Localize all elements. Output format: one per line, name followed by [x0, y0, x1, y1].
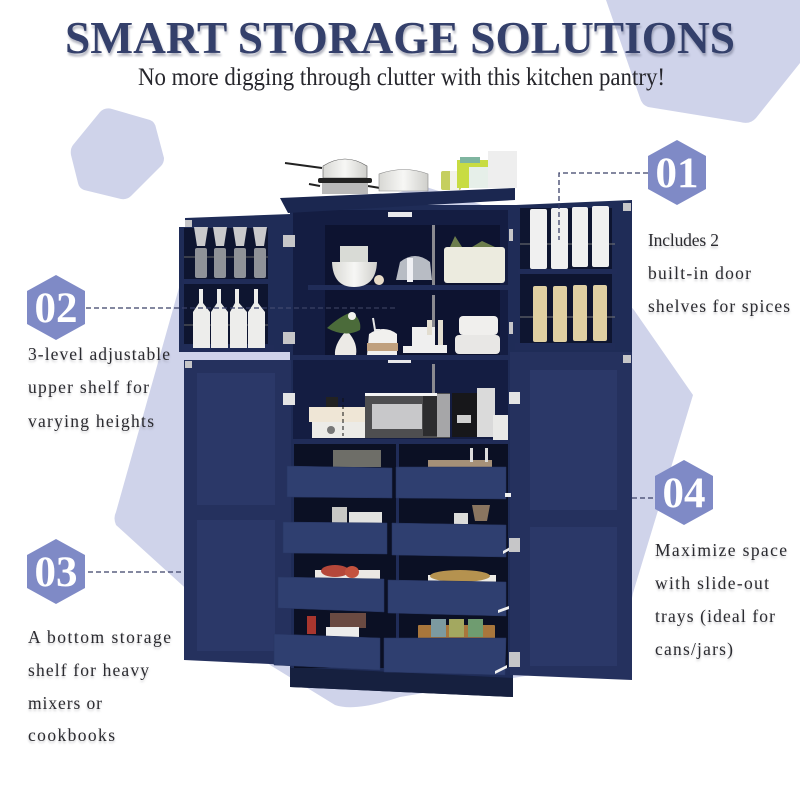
- upper shelf items: [332, 236, 505, 287]
- hexagon 01: [648, 140, 706, 205]
- hexagon 04: [655, 460, 713, 525]
- left door panels: [197, 373, 275, 505]
- right door: pasta jars: [533, 285, 607, 342]
- number 03: 03: [34, 549, 78, 596]
- drawer contents: [307, 448, 496, 640]
- text 01: shelves for spices: [648, 296, 790, 316]
- subtitle: No more digging through clutter with this kitchen pantry!: [138, 64, 665, 91]
- text 03: shelf for heavy: [28, 660, 149, 680]
- text 01: [648, 230, 790, 316]
- background shape: left hexagon: [71, 108, 164, 199]
- left door: pepper mills: [194, 227, 267, 278]
- drawers: [274, 466, 506, 675]
- text 04: with slide-out: [655, 573, 769, 593]
- faint leader continuation across cabinet: [270, 307, 395, 309]
- left door upper with shelves: [179, 214, 291, 352]
- number 01: 01: [656, 150, 698, 197]
- items on top of cabinet: [285, 151, 517, 194]
- text 04: cans/jars): [655, 639, 733, 659]
- text 03: cookbooks: [28, 725, 115, 745]
- callout 03: [27, 539, 183, 745]
- center carcass: [290, 205, 513, 697]
- text 03: [28, 627, 171, 745]
- interior: [293, 210, 508, 442]
- center column edge above drawers: [291, 443, 294, 668]
- right door: paper rolls: [530, 206, 609, 269]
- center post and lights: [388, 212, 435, 396]
- lower shelf appliances: [309, 388, 508, 440]
- top cap: [280, 188, 515, 213]
- right door lower: [510, 352, 632, 680]
- leader line 04: [632, 497, 655, 499]
- pantry cabinet illustration: [179, 151, 632, 697]
- hexagon 02: [27, 275, 85, 340]
- drawer slides: [495, 493, 511, 674]
- text 03: A bottom storage: [28, 627, 171, 647]
- callout 01: [559, 140, 790, 316]
- left door lower: [184, 360, 291, 665]
- background shape: large central blob: [114, 185, 693, 707]
- text 04: Maximize space: [655, 540, 787, 560]
- number 04: 04: [662, 470, 706, 517]
- text 03: mixers or: [28, 693, 102, 713]
- shelves: [293, 285, 510, 669]
- title: SMART STORAGE SOLUTIONS: [65, 12, 735, 63]
- middle shelf items: [327, 312, 500, 355]
- text 04: trays (ideal for: [655, 606, 775, 626]
- text 04: [655, 540, 787, 659]
- left door: oil bottles: [193, 289, 265, 348]
- background shape: top right blob: [606, 0, 800, 123]
- callout 04: [632, 460, 787, 659]
- short dashed guide on cooker: [342, 398, 344, 436]
- text 02: varying heights: [28, 411, 154, 431]
- text 02: [28, 344, 170, 431]
- text 02: upper shelf for: [28, 377, 149, 397]
- leader line 01: [559, 173, 648, 240]
- text 02: 3-level adjustable: [28, 344, 170, 364]
- right door upper with shelves: [510, 200, 632, 352]
- number 02: 02: [34, 285, 78, 332]
- hinges: [185, 203, 631, 667]
- callout 02: [27, 275, 395, 431]
- hexagon 03: [27, 539, 85, 604]
- text 01: Includes 2: [648, 230, 719, 250]
- text 01: built-in door: [648, 263, 751, 283]
- leader line 02: [86, 307, 270, 309]
- plinth: [290, 667, 513, 697]
- right door panels: [530, 370, 617, 510]
- leader line 03: [88, 571, 183, 573]
